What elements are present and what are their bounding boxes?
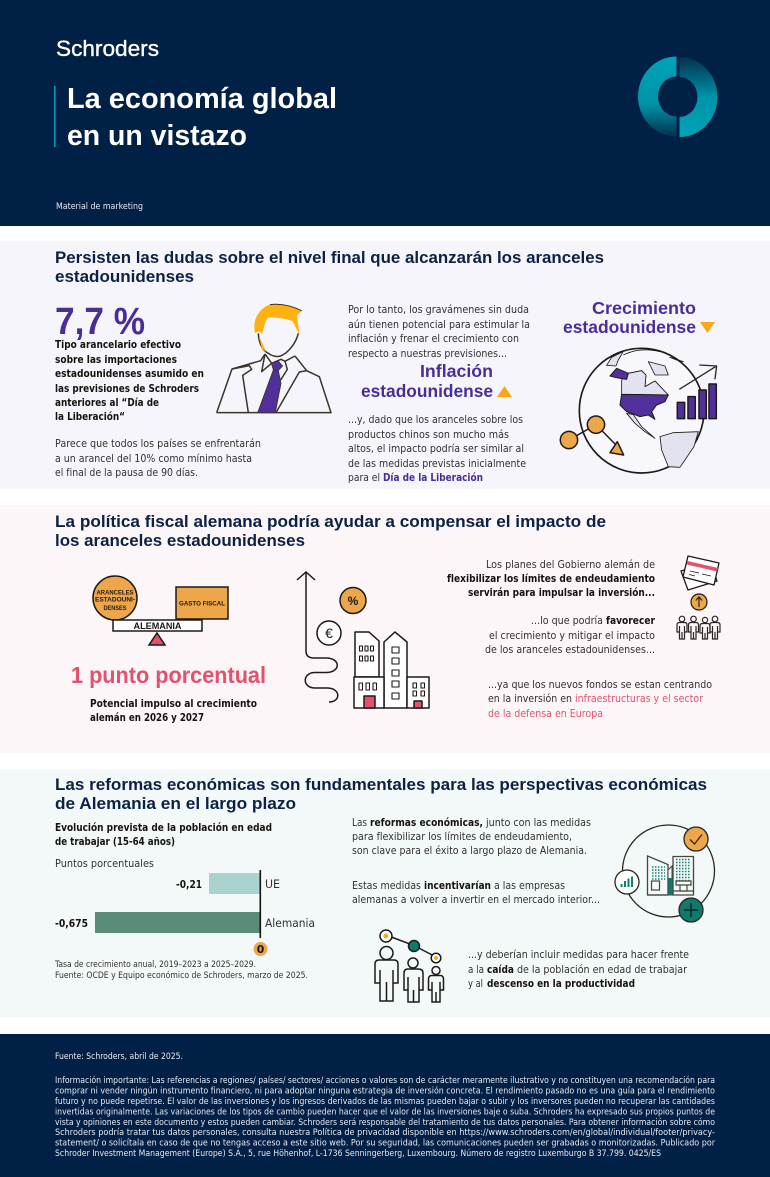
icon: up arrow badge: [691, 594, 707, 610]
text: working-age decline: [468, 948, 689, 990]
text: incentives: alemanas a volver a invertir en el mercado interior...: [352, 893, 600, 906]
text: reforms key: reformas económicas,: [370, 816, 483, 829]
text: Chinese tariffs: altos, el impacto podría ser similar al: [348, 442, 524, 455]
text: minimum tariff: Parece que todos los países se enfrentarán: [55, 437, 261, 450]
icon: globe with chart: [560, 348, 717, 473]
text: working-age decline: de la población en edad de trabajar: [517, 963, 687, 976]
text: Chinese tariffs: [348, 413, 526, 484]
text: growth boost: [90, 697, 257, 724]
panel: economic reforms: [0, 769, 770, 1017]
bar: UE: -0,21: [176, 878, 202, 891]
text: inflation potential: respecto a nuestras previsiones...: [348, 347, 507, 360]
text: reforms key: para flexibilizar los límites de endeudamiento,: [352, 830, 572, 843]
heading: reforms: de Alemania en el largo plazo: [55, 794, 296, 813]
bar chart: working-age population: [55, 870, 315, 956]
callout: US growth down: Crecimiento: [592, 298, 696, 318]
icon: workers: [677, 616, 720, 639]
text: tariff description: [55, 338, 204, 423]
zero badge: [254, 942, 268, 956]
footer disclaimer: Schroder Investment Management (Europe) S.A., 5, rue Höhenhof, L-1736 Senningerberg, Luxembourg. Número de registro Luxemburgo B 37.799. 0425/ES: [55, 1149, 661, 1159]
logo: Schroders: Schroders: [56, 36, 159, 61]
chart title: Evolución prevista de la población en edad: [55, 821, 272, 834]
icon: euro: [317, 621, 341, 645]
text: tariff description: la Liberación“: [55, 410, 125, 423]
title: La economía global: [67, 83, 337, 115]
chart source note: [54, 960, 308, 981]
text: minimum tariff: [55, 437, 261, 479]
chart axis label: Puntos porcentuales: [55, 857, 154, 870]
text: tariff description: las previsiones de Schroders: [55, 382, 199, 395]
label: marketing material: Material de marketing: [56, 202, 143, 212]
text: inflation potential: aún tienen potencial para estimular la: [348, 318, 530, 331]
bar: Alemania: -0,675: [55, 917, 88, 930]
text: reforms key: Las: [352, 816, 367, 829]
icon: percent: [340, 588, 366, 614]
text: minimum tariff: el final de la pausa de 90 días.: [55, 466, 198, 479]
text: working-age decline: descenso en la productividad: [487, 977, 635, 990]
panel: header: [0, 0, 770, 226]
icon: buildings: [354, 632, 429, 708]
chart title: de trabajar (15-64 años): [55, 835, 175, 848]
text: favour growth: el crecimiento y mitigar el impacto: [489, 629, 655, 642]
heading: tariffs: Persisten las dudas sobre el nivel final que alcanzarán los aranceles: [55, 248, 604, 267]
text: reforms key: [352, 816, 591, 857]
sub-icon: check badge: [684, 827, 708, 851]
icon: credit cards: [681, 556, 719, 590]
sub-icon: offices: [648, 856, 694, 895]
heading: tariffs: estadounidenses: [55, 267, 194, 286]
stat: 1 punto porcentual: 1 punto porcentual: [71, 662, 266, 688]
arrow: winding growth arrow: [297, 572, 338, 702]
icon: balance scale: GASTO FISCAL: [179, 600, 225, 608]
title: [54, 83, 337, 152]
callout: US growth down: [563, 298, 715, 337]
text: new funds: en la inversión en: [488, 692, 572, 705]
text: inflation potential: inflación y frenar el crecimiento con: [348, 332, 519, 345]
heading: reforms: Las reformas económicas son fundamentales para las perspectivas económicas: [55, 775, 707, 794]
icon: businessman: [217, 304, 331, 413]
heading: fiscal policy: los aranceles estadounidenses: [55, 531, 305, 550]
heading: fiscal policy: La política fiscal alemana podría ayudar a compensar el impacto de: [55, 512, 606, 531]
heading: fiscal policy: [55, 512, 606, 550]
callout: US inflation up: estadounidense: [361, 381, 493, 401]
text: tariff description: anteriores al “Día de: [55, 396, 159, 409]
text: Chinese tariffs: Día de la Liberación: [383, 471, 483, 484]
chart source note: Fuente: OCDE y Equipo económico de Schroders, marzo de 2025.: [55, 970, 308, 981]
text: Chinese tariffs: ...y, dado que los aranceles sobre los: [348, 413, 523, 426]
text: debt limits: flexibilizar los límites de endeudamiento: [447, 572, 655, 585]
text: new funds: infraestructuras y el sector: [575, 692, 703, 705]
stat: 7,7 %: 7,7 %: [55, 301, 145, 343]
text: debt limits: servirán para impulsar la inversión...: [468, 586, 655, 599]
text: favour growth: favorecer: [606, 614, 656, 627]
icon: declining population: [375, 930, 444, 1002]
text: reforms key: junto con las medidas: [485, 816, 591, 829]
text: working-age decline: caída: [487, 963, 514, 976]
heading: reforms: [55, 775, 707, 813]
text: working-age decline: y al: [468, 977, 483, 990]
text: inflation potential: Por lo tanto, los gravámenes sin duda: [348, 303, 529, 316]
callout: US inflation up: Inflación: [420, 361, 493, 381]
text: working-age decline: a la: [468, 963, 484, 976]
text: minimum tariff: a un arancel del 10% como mínimo hasta: [55, 452, 252, 465]
text: incentives: incentivarían: [424, 879, 491, 892]
text: growth boost: alemán en 2026 y 2027: [90, 711, 204, 724]
text: reforms key: son clave para el éxito a largo plazo de Alemania.: [352, 844, 587, 857]
bar: Alemania: Alemania: [265, 916, 315, 930]
callout: US inflation up: [361, 361, 512, 401]
text: tariff description: Tipo arancelario efectivo: [55, 338, 181, 351]
text: incentives: [352, 879, 600, 906]
text: incentives: a las empresas: [494, 879, 565, 892]
bar: Alemania: [55, 912, 315, 933]
sub-icon: plus badge: [679, 898, 703, 922]
icon: balance scale: ALEMANIA: [134, 621, 182, 631]
icon: euro: €: [325, 625, 333, 641]
chart title: [55, 821, 272, 848]
text: new funds: de la defensa en Europa: [488, 707, 603, 720]
text: new funds: [488, 678, 712, 720]
footer disclaimer: Schroders podría tratar tus datos personales, consulta nuestra Política de privacidad disponible en https://www.schroders.com/en/global/individual/footer/privacy-: [55, 1128, 715, 1138]
text: Chinese tariffs: de las medidas previstas inicialmente: [348, 457, 526, 470]
bar: UE: UE: [265, 877, 280, 891]
icon: balance scale: ESTADOUNI-: [95, 596, 135, 604]
axis zero line: [260, 870, 261, 938]
icon: balance scale: ARANCELES: [96, 590, 134, 596]
text: tariff description: sobre las importaciones: [55, 353, 177, 366]
text: growth boost: Potencial impulso al crecimiento: [90, 697, 257, 710]
text: favour growth: de los aranceles estadounidenses...: [485, 643, 655, 656]
footer source: Fuente: Schroders, abril de 2025.: [55, 1052, 183, 1062]
icon: balance scale: DENSES: [104, 605, 127, 612]
callout: US growth down: estadounidense: [563, 317, 696, 337]
icon: ring logo: [638, 56, 717, 137]
panel: German fiscal policy: [0, 505, 770, 753]
text: inflation potential: [348, 303, 530, 360]
sub-icon: chart badge: [615, 870, 639, 894]
bar: UE: [176, 873, 280, 894]
text: Chinese tariffs: productos chinos son mucho más: [348, 428, 509, 441]
text: incentives: Estas medidas: [352, 879, 421, 892]
text: debt limits: [447, 558, 655, 599]
chart source note: Tasa de crecimiento anual, 2019–2023 a 2025–2029.: [54, 960, 256, 970]
text: working-age decline: ...y deberían incluir medidas para hacer frente: [468, 948, 689, 961]
icon: percent: %: [348, 594, 359, 608]
title: en un vistazo: [67, 120, 247, 152]
text: new funds: ...ya que los nuevos fondos se estan centrando: [488, 678, 712, 691]
text: debt limits: Los planes del Gobierno alemán de: [486, 558, 655, 571]
panel: US tariffs: [0, 241, 770, 489]
text: favour growth: ...lo que podría: [531, 614, 603, 627]
icon: business cycle: [615, 825, 714, 922]
heading: tariffs: [55, 248, 604, 286]
panel: footer: [0, 1034, 770, 1177]
text: favour growth: [485, 614, 656, 656]
icon: balance scale: [93, 576, 228, 645]
footer disclaimer: [55, 1075, 715, 1159]
text: tariff description: estadounidenses asumido en: [55, 367, 204, 380]
text: Chinese tariffs: para el: [348, 471, 380, 484]
zero badge: 0: [257, 943, 264, 956]
